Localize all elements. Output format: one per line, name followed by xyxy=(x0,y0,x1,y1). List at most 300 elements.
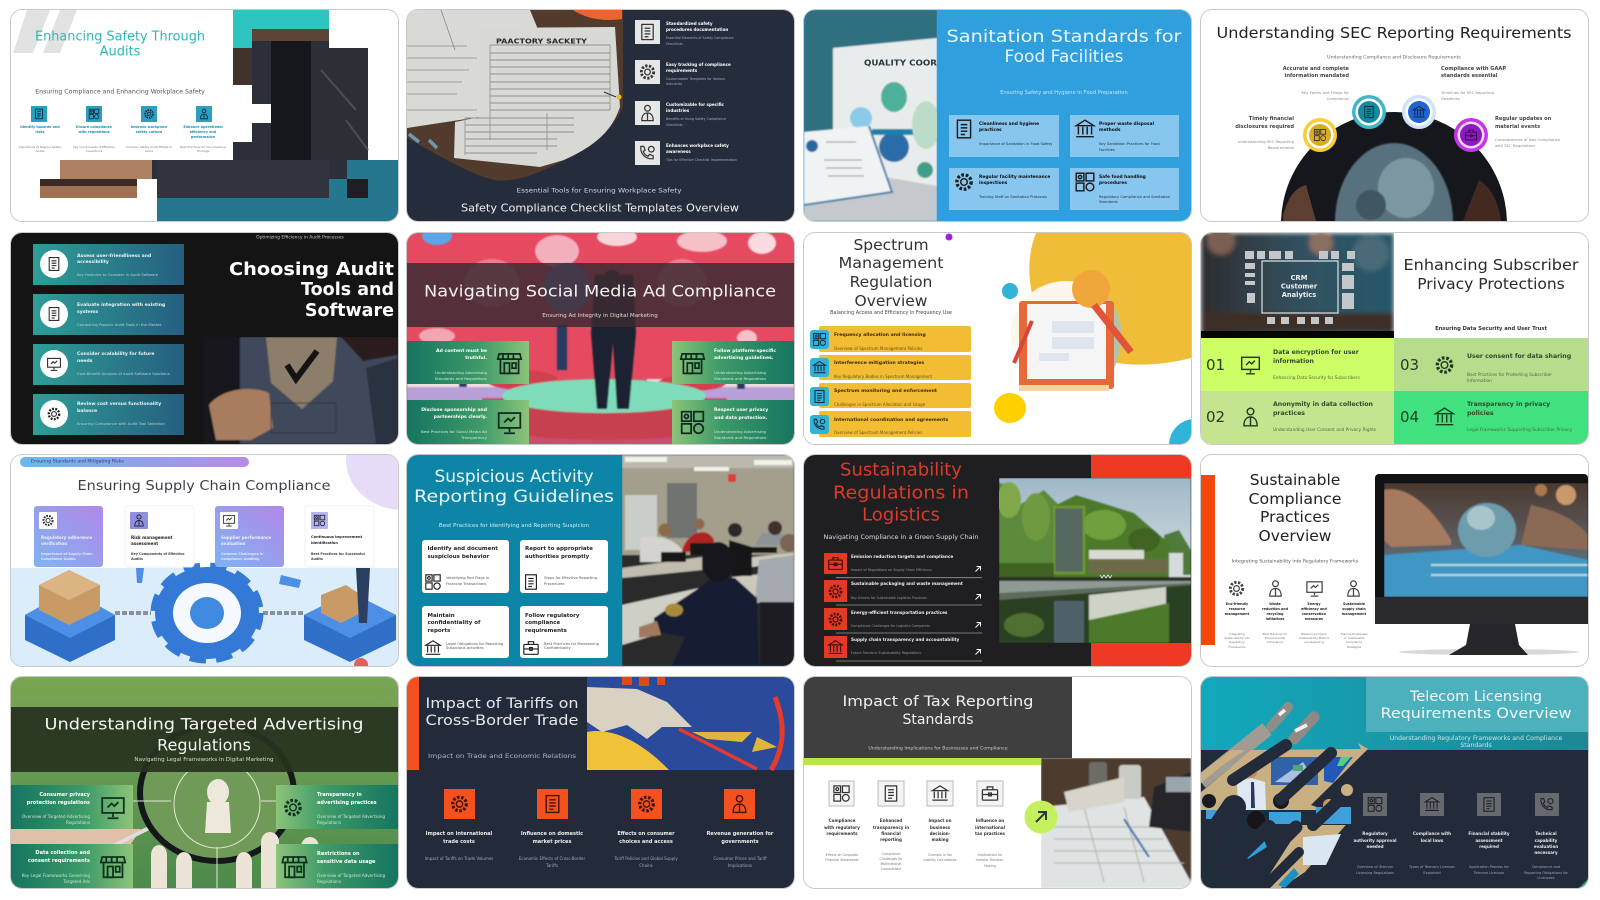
box headings: advertising practices xyxy=(317,800,377,806)
cards xyxy=(949,115,1179,210)
subtitle: Essential Tools for Ensuring Workplace Safety xyxy=(516,188,682,194)
decorative purple dot xyxy=(946,233,952,240)
list headings: Review cost versus functionality xyxy=(77,400,161,406)
box icons xyxy=(101,798,307,877)
quadrants xyxy=(1201,338,1588,444)
title xyxy=(842,694,1034,728)
decorative red blocks xyxy=(1091,455,1191,666)
list headings: Spectrum monitoring and enforcement xyxy=(834,387,938,393)
column descriptions: on Sustainable xyxy=(1344,636,1365,640)
list headings: Supply chain transparency and accountability xyxy=(851,636,960,642)
list descriptions: Key Features to Consider in Audit Software xyxy=(77,271,159,276)
column headings: Revenue generation for xyxy=(707,831,774,837)
card headings: confidentiality of xyxy=(428,620,481,626)
list headings: accessibility xyxy=(77,258,109,264)
title: Overview xyxy=(1259,527,1332,545)
title xyxy=(946,27,1182,67)
title: Ensuring Supply Chain Compliance xyxy=(78,478,330,494)
card descriptions: Suspicious Activities xyxy=(446,646,484,650)
item descriptions: Tips for Effective Checklist Implementation xyxy=(665,158,737,162)
column headings: reduction and xyxy=(1262,607,1289,611)
card descriptions: Facilities xyxy=(1099,148,1115,152)
title block xyxy=(804,677,1072,758)
column headings: recycling xyxy=(1267,612,1284,616)
column headings: efficiency and xyxy=(1301,607,1328,611)
column headings: Compliance xyxy=(829,818,856,822)
photo: shield and hand xyxy=(204,337,398,444)
box descriptions: Targeted Ads xyxy=(62,878,90,884)
column headings: Waste xyxy=(1269,602,1282,606)
title xyxy=(426,696,578,729)
panel: Sanitation Standards xyxy=(804,10,1191,221)
card descriptions: Standards xyxy=(1099,200,1118,204)
photo: CRM analytics screen xyxy=(1201,233,1394,338)
list icons xyxy=(40,250,68,428)
right labels: Compliance with GAAP xyxy=(1441,66,1506,72)
card headings: reports xyxy=(428,628,451,634)
list descriptions: Future Trends in Sustainability Regulations xyxy=(851,651,921,655)
box descriptions: Standards and Regulations xyxy=(435,375,487,380)
quadrant headings: Transparency in privacy xyxy=(1467,400,1550,407)
card descriptions: Legal Obligations for Reporting xyxy=(446,642,503,646)
left labels: Accurate and complete xyxy=(1283,66,1350,72)
column descriptions: Liability Calculations xyxy=(924,858,957,862)
feature descriptions on gradient: Compliance Auditing xyxy=(221,557,260,561)
list headings: Consider scalability for future xyxy=(77,350,155,356)
subtitle: Integrating Sustainability into Regulatory Frameworks xyxy=(1232,558,1359,564)
column headings: management xyxy=(1342,612,1367,616)
box headings: Transparency in xyxy=(317,792,362,798)
column headings: tax practices xyxy=(975,830,1006,836)
title: Safety Compliance Checklist Templates Overview xyxy=(461,202,739,214)
column headings: business xyxy=(930,824,951,830)
card headings: procedures xyxy=(1099,180,1127,186)
column labels: risks xyxy=(35,130,45,134)
list headings: Frequency allocation and licensing xyxy=(834,331,926,337)
column descriptions: Inspections xyxy=(86,149,103,153)
item headings: Standardized safety xyxy=(666,20,713,26)
title line 2: Audits xyxy=(100,44,141,60)
box descriptions: Standards and Regulations xyxy=(714,375,766,380)
title xyxy=(1380,689,1572,722)
quadrant descriptions: Legal Frameworks Supporting Subscriber Privacy xyxy=(1467,426,1573,432)
title: Impact of Tariffs on xyxy=(426,696,578,712)
photo: CRM analytics screen: CRM xyxy=(1291,274,1308,282)
decorative yellow circle xyxy=(994,392,1026,422)
list headings: Evaluate integration with existing xyxy=(77,301,165,307)
quadrant descriptions: Understanding User Consent and Privacy Rights xyxy=(1273,426,1377,432)
column descriptions: Best Practices for Documenting xyxy=(180,145,226,149)
column headings: authority approval xyxy=(1353,838,1397,842)
column descriptions: Measuring Impact: xyxy=(1301,632,1327,636)
subtitle: Balancing Access and Efficiency in Frequency Use xyxy=(830,310,952,316)
illustration: desktop monitor xyxy=(1375,474,1588,655)
right labels: material events xyxy=(1495,124,1540,130)
title: Understanding SEC Reporting Requirements xyxy=(1216,24,1572,42)
title: Software xyxy=(305,300,394,320)
illustration: balloons and stage xyxy=(407,226,794,444)
subtitle: Ensuring Data Security and User Trust xyxy=(1435,326,1547,332)
icon: yellow node xyxy=(1303,118,1337,152)
photo: jacket and hand xyxy=(40,29,368,198)
column descriptions: Investor Decision- xyxy=(976,858,1004,862)
column headings: Financial stability xyxy=(1468,830,1510,836)
photo: quality certificate xyxy=(804,10,937,221)
feature descriptions on gradient: Compliance Audits xyxy=(41,557,76,561)
feature headings on white: Risk management xyxy=(131,534,173,540)
column descriptions: Corporations xyxy=(881,867,902,871)
feature descriptions on white: Key Components of Effective xyxy=(131,552,185,556)
box descriptions: Understanding Advertising xyxy=(714,428,766,433)
box headings: Disclose sponsorship and xyxy=(421,406,487,412)
item headings: Customizable for specific xyxy=(666,102,725,106)
box headings: Data collection and xyxy=(35,850,90,856)
column descriptions: Overview of Telecom xyxy=(1357,865,1394,869)
column descriptions: Financial Statements xyxy=(825,858,859,862)
right descriptions: Timelines for SEC Reporting xyxy=(1440,90,1494,94)
icon: teal node xyxy=(1352,95,1386,129)
panel: Telecom Licensing xyxy=(1201,677,1588,888)
column descriptions: Tariff Policies and Global Supply xyxy=(613,856,678,860)
column headings: market prices xyxy=(533,839,571,845)
column descriptions: Consumer Prices and Tariff xyxy=(713,856,767,860)
column descriptions: Tariffs xyxy=(545,862,558,868)
quadrant icons xyxy=(1242,357,1453,425)
column descriptions: Training Employees xyxy=(1339,632,1368,636)
column descriptions: Avoid xyxy=(145,149,153,153)
panel: Social Media Ad Compliance xyxy=(407,232,794,444)
column headings: supply chain xyxy=(1342,607,1366,611)
title: Enhancing Subscriber xyxy=(1404,256,1579,274)
subtitle: Navigating Legal Frameworks in Digital Marketing xyxy=(134,757,274,763)
icon: purple node xyxy=(1454,118,1488,152)
subtitle: Ensuring Safety and Hygiene in Food Preparation xyxy=(1000,90,1128,96)
quadrant headings: Anonymity in data collection xyxy=(1273,400,1373,407)
column descriptions: Telecom Licenses xyxy=(1473,871,1504,875)
card descriptions: Best Practices for Maintaining xyxy=(544,642,599,646)
feature descriptions on white: Audits xyxy=(311,557,323,561)
decorative green corner xyxy=(1579,879,1588,888)
box descriptions: Best Practices for Social Media Ad xyxy=(421,428,488,433)
box headings: Consumer privacy xyxy=(39,792,91,798)
box headings: and data protection. xyxy=(714,414,767,420)
title xyxy=(1248,471,1342,545)
card headings: inspections xyxy=(979,180,1008,186)
card headings: Regular facility maintenance xyxy=(979,174,1050,180)
column descriptions: Compliance and xyxy=(1532,865,1560,869)
white cards xyxy=(422,540,608,658)
panel: Subscriber Privacy xyxy=(1201,232,1588,444)
photo: checklist on desk xyxy=(407,10,623,181)
numerals: 02 xyxy=(1206,408,1225,426)
column headings: resource xyxy=(1229,607,1246,611)
item descriptions: Industries xyxy=(666,82,683,86)
title: Tools and xyxy=(301,280,394,300)
box headings: partnerships clearly. xyxy=(434,413,487,419)
box descriptions: Standards and Regulations xyxy=(714,434,766,439)
box descriptions: Overview of Targeted Advertising xyxy=(22,814,90,818)
numerals: 04 xyxy=(1400,408,1419,426)
column labels: Enhance operational xyxy=(183,125,223,129)
list headings: systems xyxy=(77,308,99,314)
title xyxy=(414,467,614,507)
panel: Sustainability Regulations xyxy=(804,455,1191,666)
pill banner: Ensuring Standards and Mitigating Risks xyxy=(31,458,124,464)
icon: blue node xyxy=(1402,95,1436,129)
panel: Enhancing Safety Through Audits xyxy=(11,10,398,221)
column descriptions: Challenges for xyxy=(880,857,903,861)
column headings: Effects on consumer xyxy=(617,831,675,837)
column headings: Compliance with xyxy=(1413,830,1451,836)
teal top band xyxy=(1201,677,1588,750)
feature cards xyxy=(34,506,374,567)
photo: diagonal classroom strips xyxy=(1201,707,1368,888)
column descriptions: Compliance xyxy=(1267,640,1284,644)
card descriptions: Identifying Red Flags in xyxy=(446,576,490,580)
panel: Safety Compliance Checklist xyxy=(407,10,794,221)
title: Telecom Licensing xyxy=(1409,689,1542,705)
column headings: Influence on xyxy=(976,818,1004,822)
box icons xyxy=(498,353,704,433)
box headings: consent requirements xyxy=(28,858,90,864)
column headings: with regulatory xyxy=(824,824,860,830)
decorative dark teal blocks xyxy=(157,160,398,221)
list descriptions: Cost-Benefit Analysis of Audit Software Solutions xyxy=(77,370,170,375)
card headings: Maintain xyxy=(428,613,455,619)
title: Regulation xyxy=(850,272,932,290)
list bars xyxy=(819,326,971,436)
right descriptions: Consequences of Non-Compliance xyxy=(1495,136,1561,142)
list descriptions: Key Drivers for Sustainable Logistics Practices xyxy=(851,596,927,600)
photo: magnifying glass dome xyxy=(1281,112,1507,336)
column labels: Ensure compliance xyxy=(76,125,113,129)
card descriptions: Regulatory Compliance and Sanitation xyxy=(1099,195,1171,199)
column headings: decision- xyxy=(930,830,951,836)
card icons xyxy=(426,575,538,654)
column headings: initiatives xyxy=(1266,617,1284,621)
title xyxy=(838,236,944,310)
subtitle: Optimizing Efficiency in Audit Processes xyxy=(256,234,345,240)
column descriptions: Integrating xyxy=(1229,632,1245,636)
quadrant descriptions: Information xyxy=(1467,377,1492,383)
card icons xyxy=(957,120,1094,191)
grey icon tiles xyxy=(1363,793,1559,816)
quadrant descriptions: Enhancing Data Security for Subscribers xyxy=(1273,374,1361,380)
column descriptions: Regulatory xyxy=(1229,640,1245,644)
column headings: measures xyxy=(1305,617,1323,621)
quadrant headings: Data encryption for user xyxy=(1273,348,1360,355)
title: Understanding Targeted Advertising xyxy=(44,714,363,734)
numerals: 01 xyxy=(1206,356,1225,374)
feature headings on white: identification xyxy=(311,541,338,545)
subtitle: Ensuring Ad Integrity in Digital Marketing xyxy=(542,312,658,318)
panel: Tax Reporting xyxy=(804,677,1191,888)
subtitle: Best Practices for Identifying and Reporting Suspicion xyxy=(439,523,590,529)
column descriptions: Application Process for xyxy=(1469,865,1509,869)
icon tiles xyxy=(635,20,660,165)
feature headings on gradient: Regulatory adherence xyxy=(41,534,92,540)
box descriptions: Regulations xyxy=(66,820,90,824)
title panel xyxy=(1366,677,1588,732)
box headings: advertising guidelines. xyxy=(714,354,774,360)
column descriptions: Key Components of Effective xyxy=(73,145,115,149)
box headings: protection regulations xyxy=(27,800,90,806)
panel: Tariffs xyxy=(407,677,794,888)
card headings: Cleanliness and hygiene xyxy=(979,120,1039,126)
column descriptions: Implications xyxy=(728,862,752,868)
title: Overview xyxy=(855,292,928,310)
column descriptions: Explained xyxy=(1423,871,1441,875)
title: Impact of Tax Reporting xyxy=(842,694,1034,710)
column headings: required xyxy=(1479,844,1499,848)
card descriptions: Steps for Effective Reporting xyxy=(544,576,597,580)
right descriptions: Deadlines xyxy=(1441,96,1460,100)
quadrant headings: information xyxy=(1273,357,1314,364)
card descriptions: Training Staff on Sanitation Protocols xyxy=(978,195,1047,199)
column descriptions: Effects on Corporate xyxy=(826,853,858,857)
feature descriptions on gradient: Common Challenges in xyxy=(221,552,264,556)
card headings: Follow regulatory xyxy=(525,613,580,619)
photo: CRM analytics screen: Customer xyxy=(1281,282,1318,290)
list headings: International coordination and agreements xyxy=(834,416,948,422)
feature headings on gradient: verification xyxy=(41,540,67,546)
title: Navigating Social Media Ad Compliance xyxy=(424,281,776,300)
title: Requirements Overview xyxy=(1380,706,1572,722)
column headings: making xyxy=(932,836,949,842)
card headings: methods xyxy=(1099,126,1121,132)
subtitle: Standards xyxy=(1460,742,1492,748)
box descriptions: Regulations xyxy=(317,878,341,884)
column descriptions: and Reporting xyxy=(1304,640,1324,644)
quadrant descriptions: Best Practices for Protecting Subscriber xyxy=(1467,371,1552,377)
corner boxes xyxy=(11,785,398,888)
feature icons xyxy=(39,512,328,529)
panel: Suspicious Activity Reporting xyxy=(407,455,794,666)
left labels: information mandated xyxy=(1285,73,1349,79)
column descriptions: Strategies xyxy=(1347,645,1362,649)
panel: Supply Chain Compliance xyxy=(11,455,398,666)
column headings: Regulatory xyxy=(1362,830,1388,836)
item headings: Enhances workplace safety xyxy=(666,142,729,148)
box descriptions: Understanding Advertising xyxy=(435,369,488,374)
item headings: procedures documentation xyxy=(666,26,728,32)
feature descriptions on gradient: Importance of Supply Chain xyxy=(41,552,93,556)
card descriptions: Importance of Sanitation in Food Safety xyxy=(979,142,1053,146)
column headings: Technical xyxy=(1535,830,1557,836)
title xyxy=(833,460,969,526)
column descriptions: Audits xyxy=(35,149,45,153)
illustration: clipboard and magnifier xyxy=(1011,270,1131,390)
column labels: performance xyxy=(191,135,216,139)
title: Compliance xyxy=(1248,490,1342,508)
column descriptions: Multinational xyxy=(881,862,901,866)
list headings: Sustainable packaging and waste management xyxy=(851,580,963,586)
title: Cross-Border Trade xyxy=(426,713,578,729)
item headings: requirements xyxy=(666,68,698,72)
title: Sustainability xyxy=(840,460,962,480)
column descriptions: Implications for xyxy=(978,853,1003,857)
title: Suspicious Activity xyxy=(434,467,594,487)
panel: Targeted Advertising xyxy=(11,677,398,888)
box headings: Ad content must be xyxy=(436,347,487,353)
column descriptions: Types of Telecom Licenses xyxy=(1408,865,1455,869)
column headings: Impact on xyxy=(928,818,952,822)
feature headings on white: assessment xyxy=(131,540,158,546)
title: Reporting Guidelines xyxy=(414,487,614,507)
column labels: Identify hazards and xyxy=(20,125,60,129)
column descriptions: Licensing Regulations xyxy=(1356,871,1394,875)
subtitle: Understanding Implications for Businesses and Compliance xyxy=(868,746,1008,752)
right labels: standards essential xyxy=(1441,73,1498,79)
feature descriptions on white: Audits xyxy=(131,557,143,561)
right labels: Regular updates on xyxy=(1495,116,1552,122)
icon: quotation mark xyxy=(13,10,77,53)
title: Regulations xyxy=(157,736,251,754)
column descriptions: Compliance xyxy=(1346,640,1363,644)
feature descriptions on white: Best Practices for Successful xyxy=(311,552,365,556)
column headings: necessary xyxy=(1534,850,1558,854)
column descriptions: Licensees xyxy=(1537,876,1555,880)
list descriptions: Impact of Regulations on Supply Chain Efficiency xyxy=(851,568,932,572)
item headings: awareness xyxy=(666,148,691,154)
photo: CRM analytics screen: Analytics xyxy=(1282,290,1316,298)
title xyxy=(229,260,394,320)
panel: Spectrum Management xyxy=(804,232,1191,444)
card headings: Report to appropriate xyxy=(525,546,593,552)
title: Sustainable xyxy=(1250,471,1340,489)
left labels: disclosures required xyxy=(1235,124,1294,130)
title: Practices xyxy=(1260,508,1330,526)
list headings: Assess user-friendliness and xyxy=(77,252,151,258)
column icons xyxy=(1230,581,1359,596)
card descriptions: Procedures xyxy=(544,582,565,586)
list headings: needs xyxy=(77,357,93,363)
left descriptions: Key Forms and Filings for xyxy=(1302,90,1349,94)
column descriptions: Economic Effects of Cross-Border xyxy=(519,856,586,860)
numerals: 03 xyxy=(1400,356,1419,374)
box headings: Follow platform-specific xyxy=(714,347,776,353)
list headings: Energy-efficient transportation practices xyxy=(851,610,948,614)
box descriptions: Overview of Targeted Advertising xyxy=(317,872,385,878)
title: Logistics xyxy=(862,504,940,526)
title: Privacy Protections xyxy=(1417,274,1565,292)
list icons xyxy=(824,553,847,658)
item headings: industries xyxy=(666,108,690,112)
title xyxy=(44,714,363,754)
box headings: truthful. xyxy=(465,354,487,360)
photo: quality certificate: QUALITY COOR xyxy=(864,58,937,68)
item descriptions: Checklists xyxy=(666,42,683,46)
title band xyxy=(407,262,794,326)
list arrows xyxy=(976,566,980,654)
column icons xyxy=(829,781,1003,806)
subtitle: Understanding Regulatory Frameworks and Compliance xyxy=(1390,734,1562,742)
column descriptions: Compliance xyxy=(882,852,900,856)
icon row xyxy=(31,106,212,122)
panel: SEC Reporting xyxy=(1201,10,1588,221)
decorative orange bar xyxy=(1201,475,1215,645)
column descriptions: Impact of Tariffs on Trade Volumes xyxy=(425,856,493,860)
left descriptions: Understanding SEC Reporting xyxy=(1238,138,1295,144)
panel: Sustainable Compliance Practices xyxy=(1201,455,1588,666)
column descriptions: Chains xyxy=(639,862,653,868)
left descriptions: Requirements xyxy=(1268,144,1294,150)
card headings: suspicious behavior xyxy=(428,554,489,560)
left labels: Timely financial xyxy=(1249,116,1294,122)
card headings: authorities promptly xyxy=(525,554,590,560)
column descriptions: Common Safety Audit Pitfalls to xyxy=(126,145,172,149)
title: Regulations in xyxy=(833,482,969,504)
